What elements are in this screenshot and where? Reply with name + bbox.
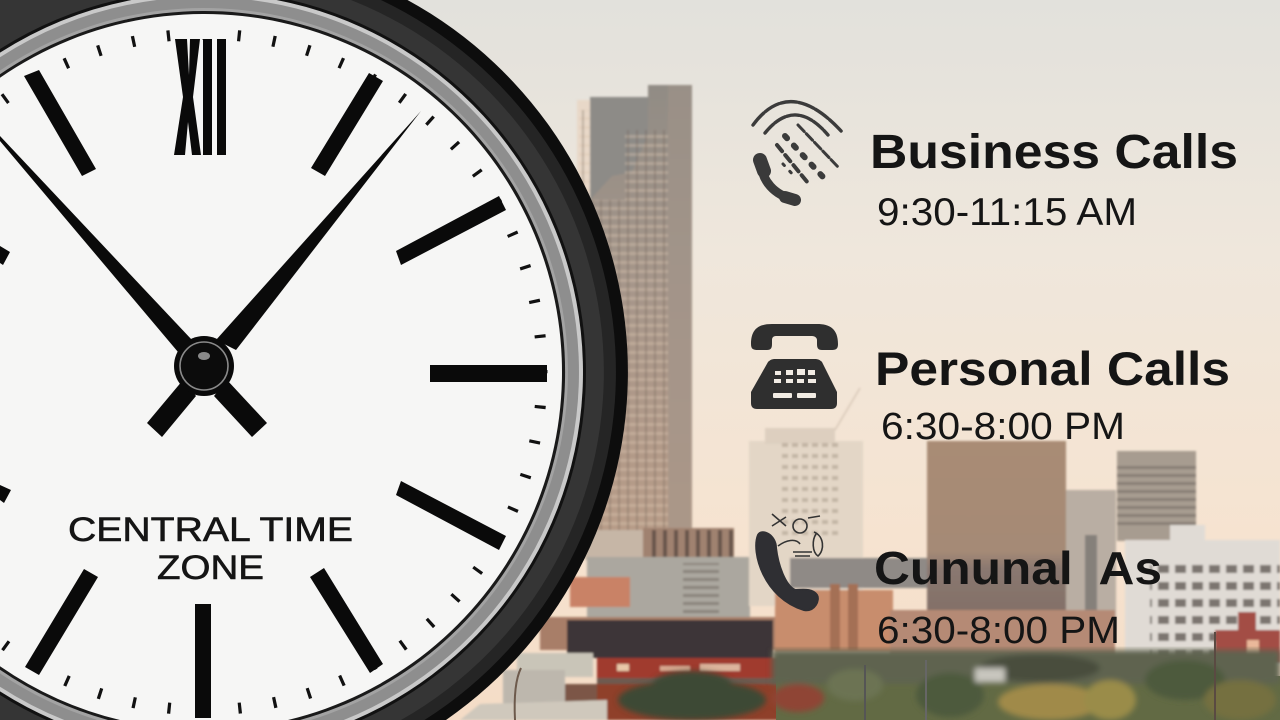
orange brick block (775, 584, 893, 652)
numeral XII (174, 39, 226, 155)
red building right (1215, 612, 1280, 663)
icon: desk telephone (751, 324, 838, 409)
clock label: ZONE (157, 549, 264, 587)
hour markers (0, 70, 547, 718)
clock label (68, 511, 353, 587)
white office block (1125, 525, 1280, 665)
item: communal calls (756, 514, 1162, 652)
item: business calls (753, 102, 1238, 234)
pale office block (749, 388, 927, 606)
wall clock (0, 0, 628, 720)
slim grey towers (1066, 490, 1116, 630)
clock hands (0, 111, 421, 437)
heading: Personal Calls (875, 342, 1230, 395)
item: personal calls (751, 324, 1230, 448)
dark roof warehouse (567, 620, 773, 658)
low rust building (890, 610, 1115, 655)
clock hub (174, 336, 234, 396)
light rooftops lower left (460, 653, 607, 720)
red brick strip with lit windows (563, 658, 780, 720)
icon: phone with doodle (756, 514, 823, 610)
time range: 6:30-8:00 PM (877, 610, 1120, 652)
icon: phone with signal waves (753, 102, 842, 200)
grey office tower (1117, 451, 1196, 541)
time range: 6:30-8:00 PM (881, 406, 1125, 448)
background: city skyline (460, 85, 1280, 720)
background: street pole (515, 668, 521, 720)
minute ticks (4, 34, 542, 710)
tall tower (577, 85, 692, 535)
clock label: CENTRAL TIME (68, 511, 353, 549)
time range: 9:30-11:15 AM (877, 191, 1137, 234)
brown tower (927, 441, 1066, 611)
heading: Business Calls (870, 126, 1238, 179)
clock bezel (0, 0, 628, 720)
clock dial (0, 14, 562, 720)
heading: Cununal As (874, 542, 1162, 594)
background: tree line (618, 632, 1280, 720)
lower-left mid-rise blocks (540, 528, 780, 650)
